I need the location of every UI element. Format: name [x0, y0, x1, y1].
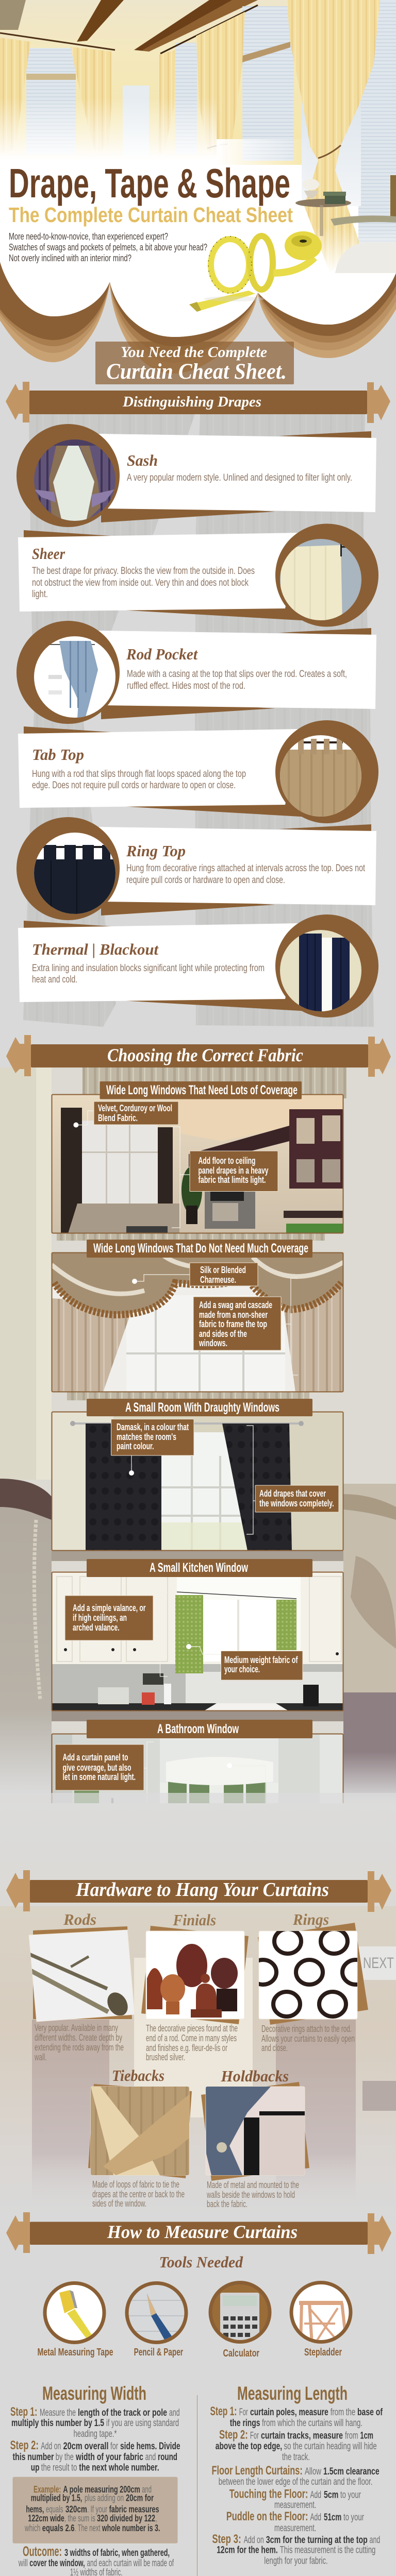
hero intro text: More need-to-know-novice, than experienced expert?	[9, 231, 168, 242]
connector: damask note	[131, 1455, 132, 1471]
callout: swag and cascade: fabric to frame the top	[199, 1319, 267, 1329]
column: measuring width: this number	[12, 2452, 54, 2463]
column: measuring length: to your	[340, 2490, 361, 2501]
column: measuring width: and	[145, 2452, 156, 2463]
banner: How to Measure Curtains: How to Measure Curtains	[107, 2222, 298, 2242]
example box: A pole measuring 200cm	[63, 2484, 140, 2495]
callout: curtain panel	[55, 1744, 144, 1790]
callout: silk: Silk or Blended	[200, 1265, 246, 1275]
card: Thermal / Blackout	[18, 914, 378, 1018]
card: Sheer: light.	[32, 588, 48, 600]
card: Ring Top	[16, 817, 376, 920]
column: measuring width: cover the window,	[29, 2558, 85, 2569]
column: measuring width: length of the track or pole	[78, 2408, 167, 2418]
side table and chair	[295, 175, 396, 273]
card: Tab Top	[18, 720, 378, 823]
card: Thermal / Blackout: Extra lining and insulation blocks significant light while protecting from	[32, 962, 265, 974]
hardware: Rings	[258, 1913, 368, 2051]
column: measuring length: 5cm	[324, 2490, 338, 2501]
example box: which	[24, 2523, 40, 2533]
callout: cover windows: the windows completely.	[259, 1498, 334, 1509]
hardware: Rods: extending the rods away from the	[35, 2042, 124, 2053]
column: measuring width: heading tape.*	[73, 2429, 117, 2439]
example box: . The next	[74, 2523, 100, 2533]
card: Sash: Sash	[127, 451, 158, 469]
panel: small kitchen window	[52, 1559, 343, 1711]
hardware: Finials: brushed silver.	[146, 2052, 185, 2062]
callout: valance: Add a simple valance, or	[73, 1603, 145, 1613]
curtains in the hero photo	[0, 0, 380, 273]
hardware: Finials: end of a rod. Come in many styles	[146, 2033, 237, 2043]
hardware: Rods: Rods	[63, 1910, 96, 1928]
column: measuring length: the track.	[282, 2452, 310, 2463]
banner: How to Measure Curtains	[6, 2212, 391, 2254]
callout: voile: A heavier Voile or Plissé.	[226, 1817, 299, 1827]
callout box: you need the cheat sheet	[95, 342, 294, 384]
measuring tape photo	[189, 231, 322, 312]
column: measuring length: For	[250, 2431, 259, 2441]
column: measuring length: measurement.	[274, 2500, 316, 2511]
hardware: Tiebacks: Tiebacks	[112, 2066, 164, 2084]
column: measuring length: from	[345, 2431, 358, 2441]
callout: floor to ceiling: Add floor to ceiling	[198, 1156, 256, 1166]
column: measuring length: Add	[310, 2512, 321, 2523]
column: measuring length: Add	[310, 2490, 321, 2501]
hardware: Tiebacks: drapes at the centre or back to the	[92, 2189, 185, 2199]
banner: Choosing the Correct Fabric	[6, 1035, 391, 1077]
example box: 122cm wide	[28, 2513, 64, 2523]
callout: damask: paint colour.	[117, 1441, 154, 1451]
hardware: Holdbacks	[201, 2067, 309, 2209]
image: sheer curtain	[280, 539, 361, 620]
column: measuring width: and	[169, 2408, 180, 2418]
example box: equals	[46, 2504, 63, 2515]
callout: floor to ceiling: panel drapes in a heavy	[198, 1165, 268, 1176]
hero intro text: Swatches of swags and pockets of pelmets, a bit above your head?	[9, 242, 207, 252]
connector: medium weight note	[191, 1647, 221, 1654]
callout: cover windows	[255, 1485, 339, 1512]
column: measuring length: from the	[331, 2407, 355, 2418]
example box: hems,	[26, 2504, 44, 2515]
callout: cover windows: Add drapes that cover	[259, 1488, 326, 1499]
example box: and	[142, 2484, 152, 2495]
column: measuring width: Step 2:	[10, 2438, 39, 2452]
column: measuring length: Floor Length Curtains:	[211, 2464, 303, 2478]
card: Sash	[16, 424, 376, 527]
column: measuring length: measurement.	[274, 2523, 316, 2534]
swag pelmet layers	[0, 262, 396, 374]
column: measuring length: the rings	[230, 2418, 260, 2429]
hardware: Holdbacks: Holdbacks	[221, 2067, 289, 2085]
photo: kitchen	[52, 1572, 343, 1711]
callout: velvet	[94, 1101, 178, 1125]
callout box: you need the cheat sheet: Curtain Cheat Sheet.	[106, 360, 287, 384]
photo: double curtain rods	[30, 1953, 128, 2015]
callout: medium weight fabric: your choice.	[224, 1664, 260, 1674]
card: Thermal / Blackout: Thermal | Blackout	[32, 940, 159, 958]
callout: floor to ceiling: fabric that limits light.	[198, 1175, 266, 1185]
panel: bathroom window: A Bathroom Window	[157, 1722, 239, 1736]
example box	[12, 2477, 177, 2544]
hardware: Rods: different widths. Create depth by	[35, 2032, 122, 2043]
hero subtitle: The Complete Curtain Cheat Sheet	[9, 203, 293, 227]
card: Rod Pocket: Rod Pocket	[126, 645, 198, 663]
tool: metal measuring tape	[37, 2281, 113, 2358]
connector: swag note	[281, 1278, 298, 1375]
column: measuring length: 1cm	[360, 2431, 373, 2441]
connector: voile note	[232, 1766, 266, 1812]
callout: swag and cascade: and sides of the	[199, 1329, 247, 1339]
example box: 320 divided by 122	[97, 2513, 155, 2523]
callout: swag and cascade: Add a swag and cascade	[199, 1300, 272, 1310]
card: Tab Top: Tab Top	[32, 745, 84, 764]
tool: metal measuring tape: Metal Measuring Tape	[37, 2347, 113, 2358]
column: measuring length: curtain poles, measure	[250, 2407, 328, 2418]
photo: tieback curtain	[91, 2087, 189, 2175]
callout: velvet: Blend Fabric.	[98, 1113, 138, 1123]
column: measuring length: Add on	[244, 2535, 264, 2546]
card: Tab Top: edge. Does not require pull cords or hardware to open or close.	[32, 779, 236, 791]
column: measuring width: will	[18, 2558, 28, 2569]
column: measuring width: the next whole number.	[79, 2463, 159, 2473]
card: Ring Top: require pull cords or hardware to open and close.	[126, 874, 285, 886]
column: measuring width: 20cm overall	[63, 2441, 108, 2452]
hero photo: sunlit room with curtains	[0, 0, 396, 340]
callout: damask: Damask, in a colour that	[117, 1422, 189, 1432]
column: measuring length: curtain tracks, measure	[261, 2431, 343, 2441]
hardware: Rings: Rings	[292, 1910, 329, 1928]
column: measuring width: side hems. Divide	[120, 2441, 180, 2452]
banner: Choosing the Correct Fabric: Choosing the Correct Fabric	[107, 1045, 303, 1065]
column: measuring width: and each curtain will be made of	[87, 2558, 174, 2569]
image: ring top curtain	[34, 833, 116, 914]
connector: valance note	[153, 1592, 168, 1676]
column: measuring length: For	[239, 2407, 248, 2418]
example box: 20cm for	[126, 2493, 154, 2503]
connector: drapes note	[246, 1426, 255, 1534]
callout: silk: Charmeuse.	[200, 1275, 236, 1285]
callout: swag and cascade: made from a non-sheer	[199, 1310, 268, 1320]
image: sash curtain	[34, 439, 116, 521]
photo: bathroom	[52, 1734, 343, 1803]
photo: living room	[52, 1094, 343, 1233]
example box: 320cm	[65, 2504, 87, 2515]
column: measuring width: multiply this number by 1.5	[11, 2418, 104, 2429]
example box: whole number is 3.	[102, 2523, 160, 2533]
example box: , the sum is	[64, 2513, 95, 2523]
card: Sheer: Sheer	[32, 545, 65, 563]
banner: Distinguishing Drapes: Distinguishing Drapes	[122, 394, 261, 410]
panel: small kitchen window: A Small Kitchen Window	[150, 1561, 248, 1575]
panel: wide long windows, lots of coverage	[52, 1081, 343, 1233]
hardware: Finials: The decorative pieces found at the	[146, 2023, 238, 2033]
hero intro text	[9, 231, 207, 263]
column: measuring length: to your	[343, 2512, 364, 2523]
tool: pencil and paper	[125, 2281, 188, 2358]
callout: swag and cascade: windows.	[199, 1338, 227, 1348]
callout: damask: matches the room's	[117, 1432, 176, 1442]
callout: floor to ceiling	[190, 1151, 278, 1191]
tool: stepladder: Stepladder	[304, 2347, 342, 2358]
hardware: Tiebacks	[88, 2066, 192, 2209]
example box: equals 2.6	[42, 2523, 74, 2533]
callout: silk	[190, 1263, 258, 1286]
column: measuring length: length for your fabric.	[264, 2555, 328, 2567]
hardware: Finials: and finishes e.g. fleur-de-lis or	[146, 2043, 227, 2053]
column: measuring width: Measure the	[40, 2408, 76, 2418]
card: Thermal / Blackout: heat and cold.	[32, 974, 77, 985]
column: measuring length: 12cm for the hem.	[217, 2545, 278, 2556]
panel: small room with draughty windows	[52, 1399, 343, 1551]
column: measuring length: Puddle on the Floor:	[226, 2510, 308, 2523]
hardware: Rods: wall.	[34, 2052, 46, 2062]
connector: curtain panel note	[144, 1742, 154, 1825]
hardware: Finials: Finials	[173, 1911, 216, 1929]
banner: Hardware to Hang Your Curtains: Hardware to Hang Your Curtains	[75, 1879, 329, 1901]
hardware: Rings: and close.	[261, 2043, 288, 2053]
column: measuring width: up	[31, 2463, 39, 2473]
card: Sheer	[18, 523, 378, 626]
tool: stepladder	[290, 2281, 353, 2358]
hardware: Rods: Very popular. Available in many	[35, 2023, 118, 2033]
card: Tab Top: Hung with a rod that slips through flat loops spaced along the top	[32, 768, 246, 779]
callout: valance: if high ceilings, an	[73, 1613, 127, 1623]
callout box: you need the cheat sheet: You Need the Complete	[121, 344, 267, 361]
column: measuring length: base of	[357, 2407, 383, 2418]
hero intro text: Not overly inclined with an interior mind?	[9, 253, 131, 263]
example box: . If your	[87, 2504, 107, 2515]
tool: calculator: Calculator	[223, 2348, 259, 2359]
connector: drape note	[172, 1127, 190, 1228]
connector: silk note	[137, 1275, 190, 1281]
card: Ring Top: Ring Top	[126, 842, 186, 860]
hardware: Tiebacks: sides of the window.	[92, 2198, 146, 2209]
column: measuring width	[10, 2383, 180, 2576]
photo: holdback with grey curtain	[206, 2087, 305, 2175]
image: rod pocket curtain	[34, 636, 116, 718]
callout: medium weight fabric	[221, 1651, 303, 1680]
column: measuring length: and	[370, 2535, 380, 2546]
fabric section background photo	[0, 1067, 396, 1815]
column: measuring width: by the	[56, 2452, 74, 2463]
hardware: Tiebacks: Made of loops of fabric to tie the	[92, 2179, 179, 2190]
column: measuring width: round	[158, 2452, 177, 2463]
card: Rod Pocket	[16, 621, 376, 724]
example box: multiplied by 1.5,	[31, 2493, 82, 2503]
hardware: Holdbacks: walls beside the windows to hold	[206, 2190, 295, 2200]
photo: wooden finials	[147, 1944, 238, 2018]
tool: pencil and paper: Pencil & Paper	[134, 2347, 183, 2358]
heading: tools needed: Tools Needed	[159, 2253, 243, 2271]
card: Sheer: not obstruct the view from inside out. Very thin and does not block	[32, 577, 249, 588]
column: measuring width: the result to	[41, 2463, 77, 2473]
backdrop curtains behind drape cards	[23, 414, 374, 1027]
callout: valance: arched valance.	[73, 1622, 120, 1633]
callout: curtain panel: let in some natural light.	[63, 1772, 136, 1782]
column: measuring width: for	[110, 2441, 118, 2452]
example box: plus adding on	[85, 2493, 124, 2503]
hardware: Holdbacks: back the fabric.	[207, 2199, 248, 2209]
column: measuring length: Step 1:	[210, 2404, 237, 2418]
column: measuring width: if you are using standard	[106, 2418, 179, 2429]
column: measuring width: width of your fabric	[75, 2452, 143, 2463]
image: blackout curtain	[280, 930, 361, 1011]
column: measuring length: Step 2:	[219, 2428, 248, 2442]
column: measuring length: Touching the Floor:	[229, 2487, 308, 2501]
banner: Distinguishing Drapes	[6, 382, 390, 423]
tool: calculator	[208, 2281, 271, 2359]
callout: swag and cascade	[193, 1297, 281, 1350]
hardware: Holdbacks: Made of metal and mounted to the	[207, 2180, 299, 2190]
hardware: Finials	[141, 1911, 249, 2062]
callout: velvet: Velvet, Corduroy or Wool	[98, 1103, 172, 1113]
example box: ,	[156, 2513, 157, 2523]
callout: medium weight fabric: Medium weight fabric of	[224, 1655, 298, 1665]
photo: black damask drapes	[52, 1412, 343, 1551]
callout: curtain panel: Add a curtain panel to	[63, 1752, 128, 1762]
example box: Example:	[34, 2484, 61, 2495]
column: measuring width: Measuring Width	[42, 2383, 146, 2404]
photo: swag and cascade	[52, 1252, 343, 1392]
column: measuring width: Step 1:	[10, 2405, 37, 2419]
panel: small room with draughty windows: A Small Room With Draughty Windows	[125, 1400, 279, 1415]
callout: valance	[65, 1596, 153, 1640]
column: measuring length: Allow	[305, 2466, 321, 2477]
column: measuring width: 3 widths of fabric, when gathered,	[64, 2548, 170, 2558]
example box: fabric measures	[109, 2504, 159, 2515]
banner: Hardware to Hang Your Curtains	[6, 1870, 391, 1912]
hardware: Rods	[26, 1910, 135, 2062]
hardware section background photo	[0, 1793, 396, 2215]
column: measuring length: Step 3:	[212, 2532, 241, 2546]
column: measuring length: above the top edge,	[216, 2441, 282, 2452]
column: measuring length	[210, 2383, 383, 2567]
connector: fabric note	[78, 1111, 94, 1125]
column: measuring width: Add on	[41, 2441, 61, 2452]
panel: bathroom window	[52, 1720, 343, 1803]
card: Rod Pocket: ruffled effect. Hides most of the rod.	[127, 680, 245, 691]
photo: curtain rings	[259, 1931, 357, 2019]
card: Sheer: The best drape for privacy. Blocks the view from the outside in. Does	[32, 565, 255, 577]
image: tab top curtain	[280, 735, 361, 817]
panel: wide long windows, little coverage	[52, 1240, 343, 1392]
column: measuring length: 51cm	[324, 2512, 341, 2523]
column: measuring width: Outcome:	[23, 2544, 62, 2559]
callout: damask	[111, 1419, 194, 1455]
callout: voile	[221, 1812, 303, 1832]
callout: curtain panel: give coverage, but also	[63, 1762, 131, 1773]
